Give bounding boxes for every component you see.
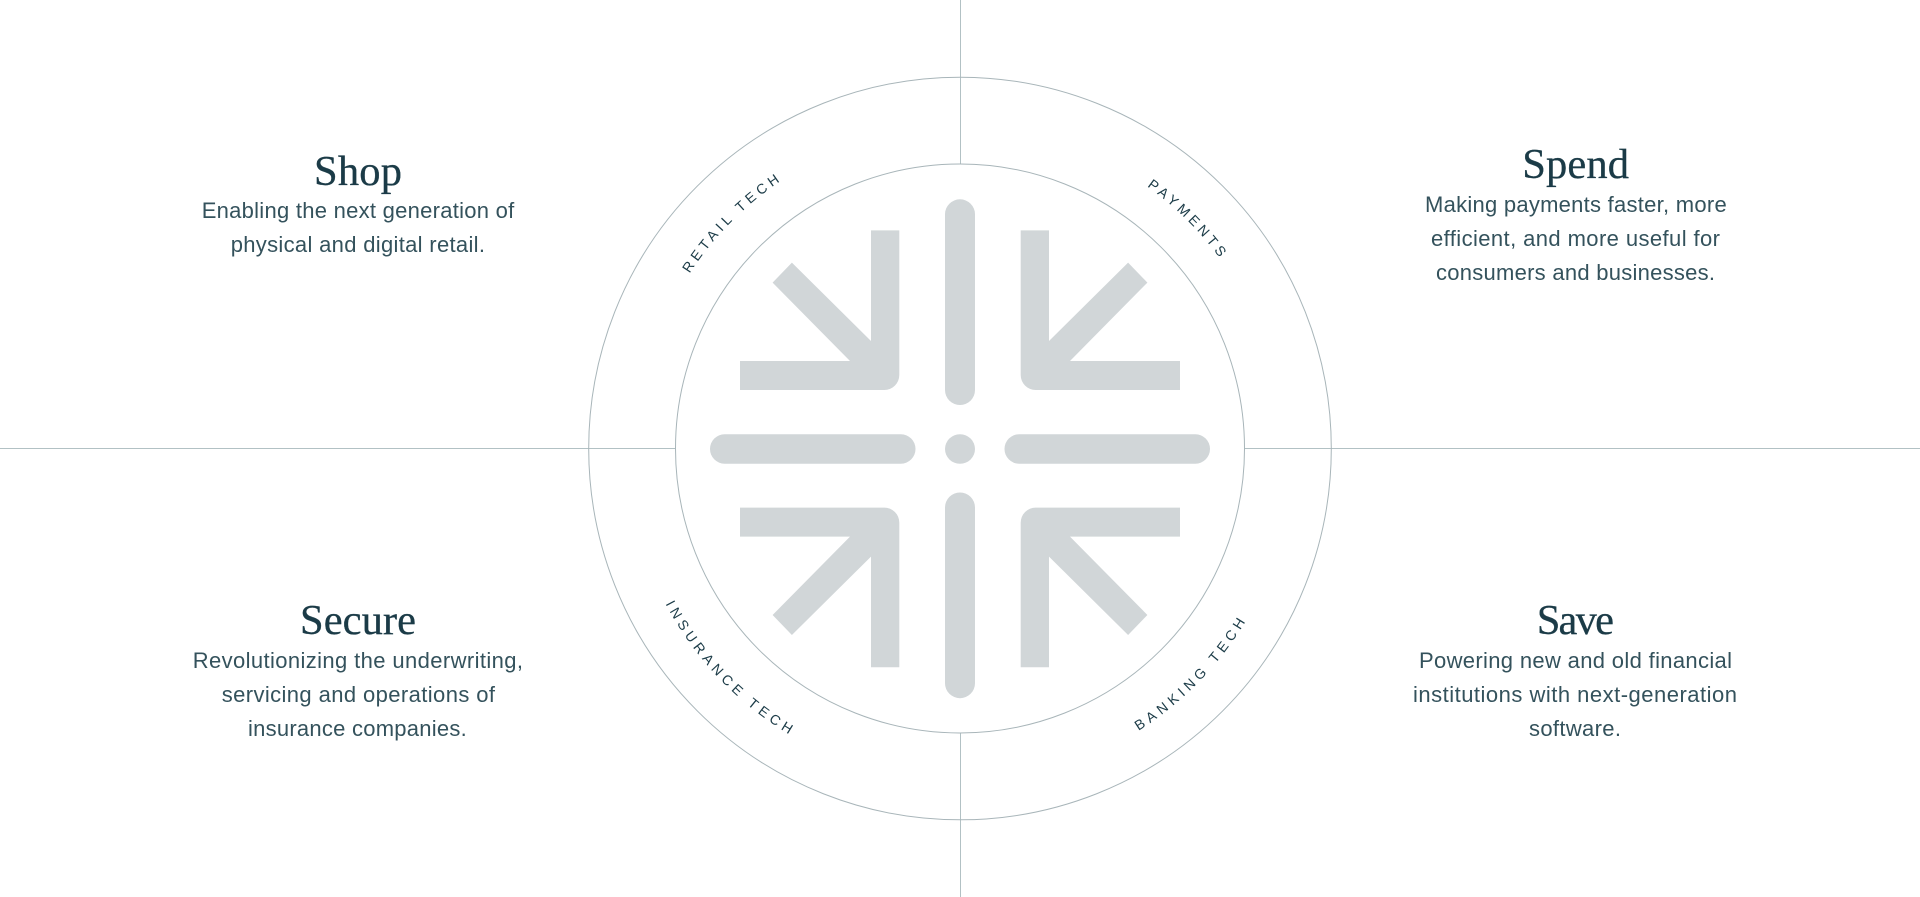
bar: bottom bbox=[945, 492, 975, 698]
text block: spend description bbox=[1425, 192, 1727, 285]
ring label: payments: PAYMENTS bbox=[1148, 179, 1226, 256]
arrow: top right bbox=[1021, 230, 1180, 390]
inner ring bbox=[676, 164, 1244, 733]
ring label: insurance tech: INSURANCE TECH bbox=[666, 600, 793, 734]
heading: spend: Spend bbox=[1522, 141, 1629, 188]
text block: save description bbox=[1413, 648, 1737, 741]
text block: spend description: Making payments faster, more bbox=[1425, 192, 1727, 217]
arrow: bottom left bbox=[740, 508, 899, 667]
bar: right bbox=[1004, 434, 1210, 464]
central emblem bbox=[710, 199, 1210, 698]
panel: save bbox=[1413, 597, 1737, 741]
text block: spend description: consumers and businesses. bbox=[1436, 260, 1715, 285]
ring label: retail tech: RETAIL TECH bbox=[682, 174, 779, 273]
text block: spend description: efficient, and more useful for bbox=[1431, 226, 1720, 251]
outer ring bbox=[589, 77, 1331, 820]
text block: shop description bbox=[202, 198, 515, 257]
text block: secure description bbox=[193, 648, 523, 741]
text block: save description: software. bbox=[1529, 716, 1621, 741]
centre dot bbox=[945, 434, 975, 464]
heading: save: Save bbox=[1537, 597, 1614, 644]
text block: shop description: physical and digital retail. bbox=[231, 232, 485, 257]
arrow: bottom right bbox=[1021, 508, 1180, 667]
heading: secure: Secure bbox=[300, 597, 416, 644]
bar: top bbox=[945, 199, 975, 405]
panel: spend bbox=[1425, 141, 1727, 285]
bar: left bbox=[710, 434, 916, 464]
arrow: top left bbox=[740, 230, 899, 390]
panel: shop bbox=[202, 148, 515, 257]
text block: secure description: servicing and operations of bbox=[222, 682, 496, 707]
text block: save description: Powering new and old financial bbox=[1419, 648, 1732, 673]
ring label: banking tech: BANKING TECH bbox=[1134, 618, 1245, 730]
panel: secure bbox=[193, 597, 523, 741]
heading: shop: Shop bbox=[314, 148, 402, 195]
text block: save description: institutions with next-generation bbox=[1413, 682, 1737, 707]
text block: secure description: insurance companies. bbox=[248, 716, 467, 741]
text block: shop description: Enabling the next generation of bbox=[202, 198, 515, 223]
text block: secure description: Revolutionizing the underwriting, bbox=[193, 648, 523, 673]
